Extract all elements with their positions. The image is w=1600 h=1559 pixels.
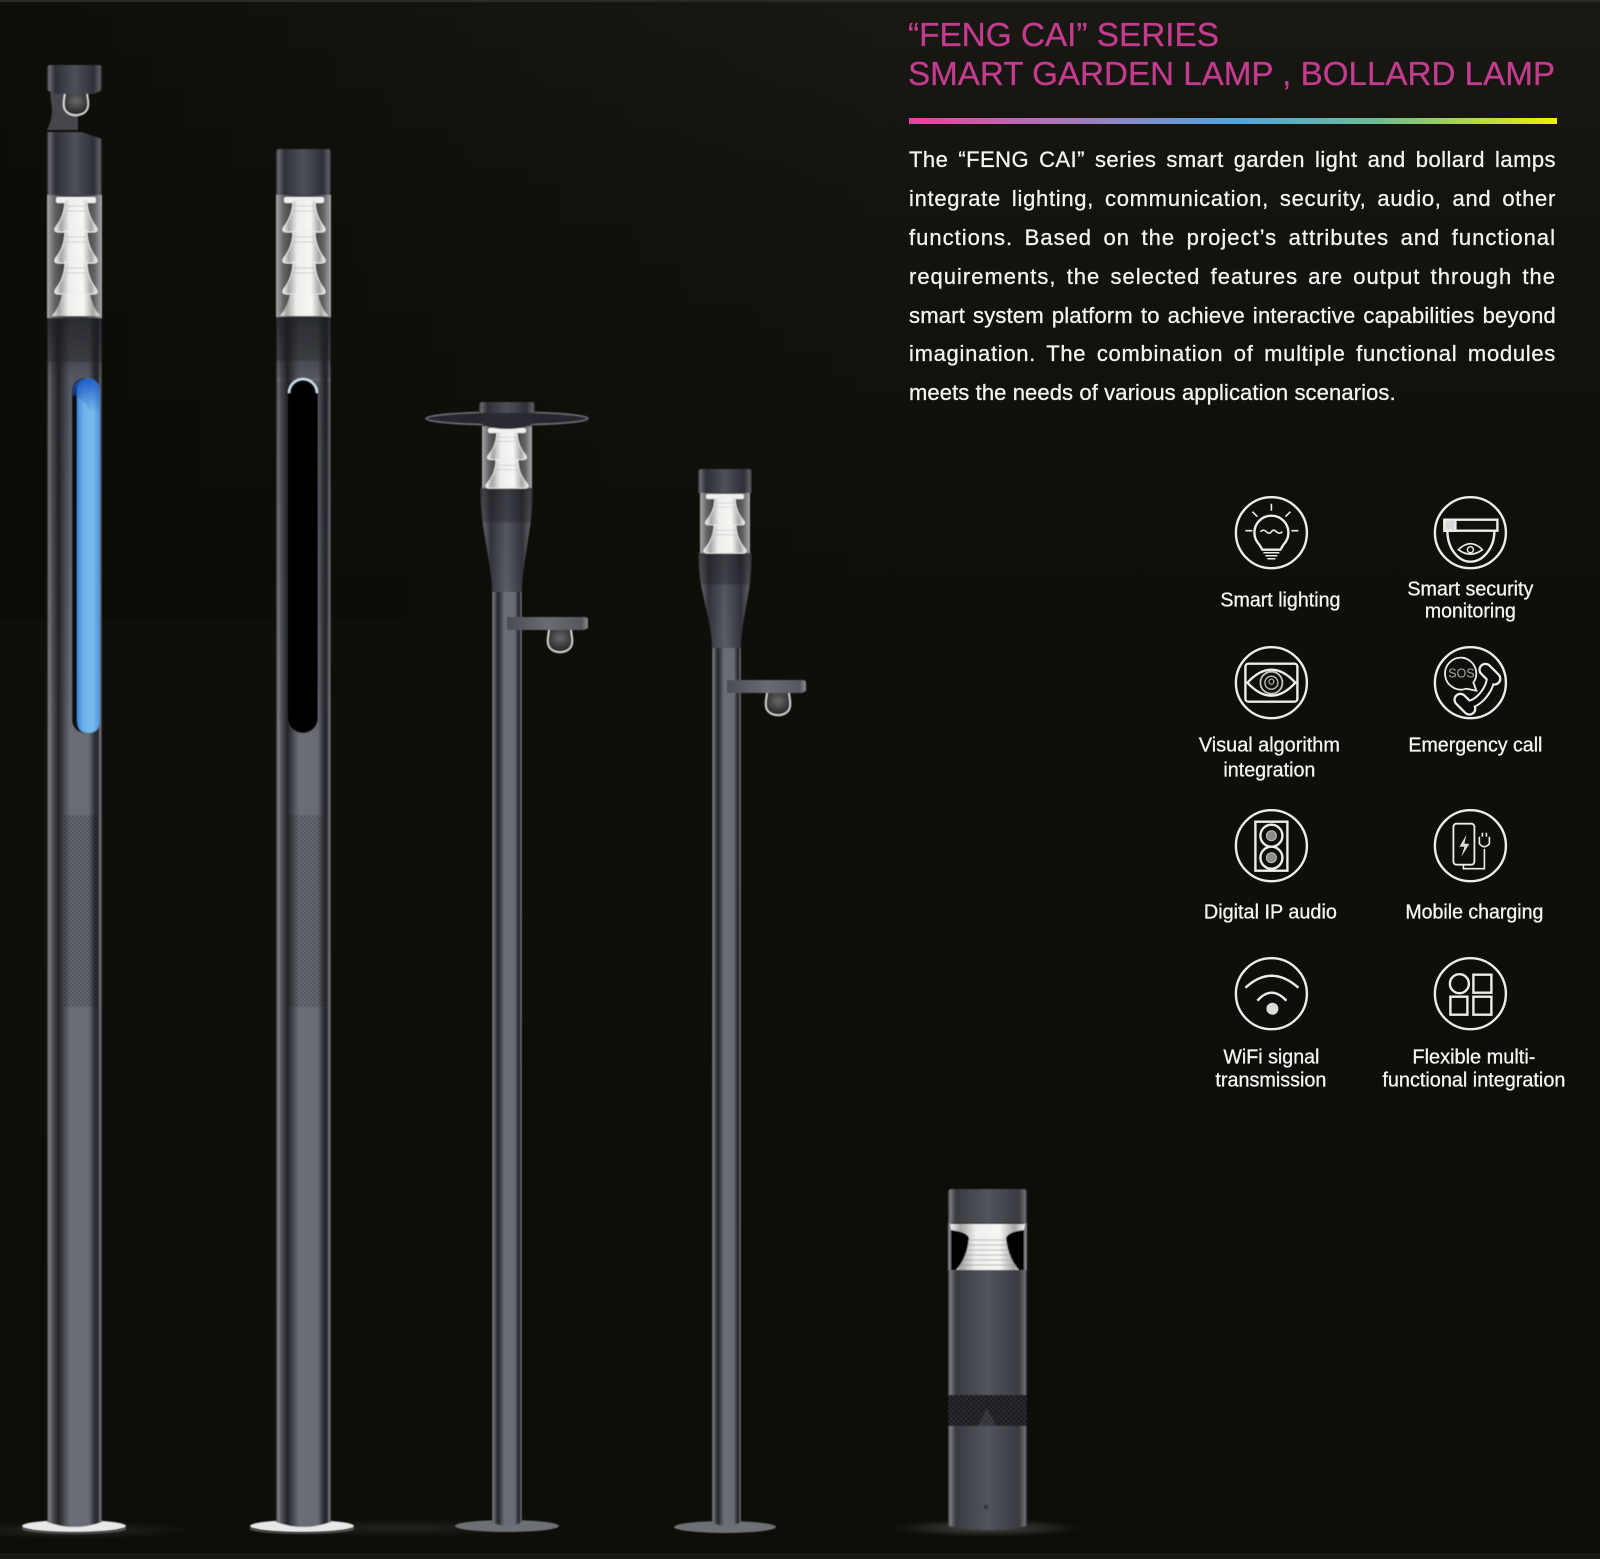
icon: modules	[1435, 958, 1506, 1029]
base plate	[250, 1520, 354, 1534]
title: SMART GARDEN LAMP , BOLLARD LAMP	[908, 55, 1555, 92]
label: integration	[1223, 760, 1315, 782]
upper dark section	[276, 317, 331, 379]
body text: smart system platform to achieve interactive capabilities beyond	[909, 303, 1556, 328]
icon: WiFi	[1236, 958, 1307, 1029]
sensor dot	[984, 1504, 988, 1510]
icon: dome camera	[1435, 497, 1506, 568]
black slot with blue rim	[288, 378, 318, 733]
camera arm	[507, 617, 588, 630]
icon: eye in frame	[1236, 647, 1307, 718]
top section	[276, 149, 331, 195]
body text: imagination. The combination of multiple functional modules	[909, 341, 1556, 366]
label: Emergency call	[1408, 735, 1542, 757]
label	[1382, 1047, 1565, 1092]
lamp 1: tall pole with camera head and blue light	[22, 65, 126, 1534]
label: Mobile charging	[1405, 902, 1543, 924]
label: Flexible multi-	[1412, 1047, 1535, 1069]
glass lens chamber	[276, 195, 331, 317]
label: Digital IP audio	[1204, 902, 1337, 924]
lens window	[948, 1223, 1027, 1270]
pole body	[47, 318, 102, 1527]
label	[1407, 579, 1533, 623]
body text: The “FENG CAI” series smart garden light and bollard lamps	[909, 147, 1556, 172]
camera dome	[64, 93, 88, 115]
camera dome	[766, 693, 790, 715]
glass lens chamber	[482, 426, 532, 488]
skirt under cap	[481, 414, 533, 429]
speaker mesh	[288, 815, 326, 1007]
base plate	[455, 1520, 559, 1532]
label: Visual algorithm	[1199, 735, 1340, 757]
label: Smart lighting	[1220, 590, 1340, 612]
label: monitoring	[1425, 601, 1516, 623]
body text: integrate lighting, communication, security, audio, and other	[909, 186, 1556, 211]
flared neck	[480, 488, 533, 592]
top cap	[479, 402, 535, 413]
stem	[492, 590, 522, 1526]
lamp 3: garden lamp with brim	[426, 402, 588, 1532]
camera arm	[727, 680, 806, 693]
pole body	[276, 317, 331, 1527]
feature grid	[1199, 497, 1565, 1092]
camera neck	[47, 93, 78, 130]
title: “FENG CAI” SERIES	[908, 16, 1219, 53]
bollard body	[948, 1189, 1027, 1530]
label: functional integration	[1382, 1070, 1565, 1092]
label	[1199, 735, 1340, 782]
icon: light bulb	[1236, 497, 1307, 568]
body text	[909, 147, 1556, 405]
speaker mesh band	[948, 1395, 1027, 1426]
top cap	[698, 469, 752, 493]
speaker mesh	[64, 815, 98, 1007]
feature: smart lighting	[1220, 497, 1340, 612]
stem	[712, 645, 741, 1526]
lamp 4: garden lamp with cap	[674, 469, 806, 1533]
icon: SOS phone: SOS	[1448, 667, 1475, 681]
camera dome	[548, 630, 572, 652]
ground glow	[0, 1519, 1082, 1539]
blue light slot	[72, 378, 100, 733]
icon: phone and plug	[1435, 810, 1506, 881]
body text: meets the needs of various application scenarios.	[909, 380, 1396, 405]
feature: digital IP audio	[1204, 810, 1337, 924]
glass lens chamber	[47, 195, 102, 318]
glass lens chamber	[700, 493, 750, 553]
lamp 5: bollard	[948, 1189, 1027, 1530]
label	[1215, 1047, 1326, 1092]
flared neck	[698, 553, 752, 648]
feature: flexible multi-functional integration	[1382, 958, 1565, 1092]
feature: emergency call	[1408, 647, 1542, 757]
mid shading	[276, 380, 331, 740]
icon: speaker	[1236, 810, 1307, 881]
feature: visual algorithm integration	[1199, 647, 1340, 782]
body text: requirements, the selected features are output through the	[909, 264, 1556, 289]
feature: smart security monitoring	[1407, 497, 1533, 623]
feature: mobile charging	[1405, 810, 1543, 924]
lamp 2: tall pole with dark slot	[250, 149, 354, 1534]
gradient rule	[909, 118, 1557, 124]
label: transmission	[1215, 1070, 1326, 1092]
label: WiFi signal	[1223, 1047, 1319, 1069]
brim	[426, 412, 588, 425]
mid shading	[47, 380, 102, 740]
upper dark section	[47, 318, 102, 380]
base plate	[674, 1521, 776, 1533]
top cap	[47, 65, 102, 94]
feature: WiFi signal transmission	[1215, 958, 1326, 1092]
body text: functions. Based on the project’s attributes and functional	[909, 225, 1556, 250]
label: Smart security	[1407, 579, 1533, 601]
title	[908, 16, 1555, 92]
upper body with chamfer	[47, 132, 102, 195]
base plate	[22, 1520, 126, 1534]
